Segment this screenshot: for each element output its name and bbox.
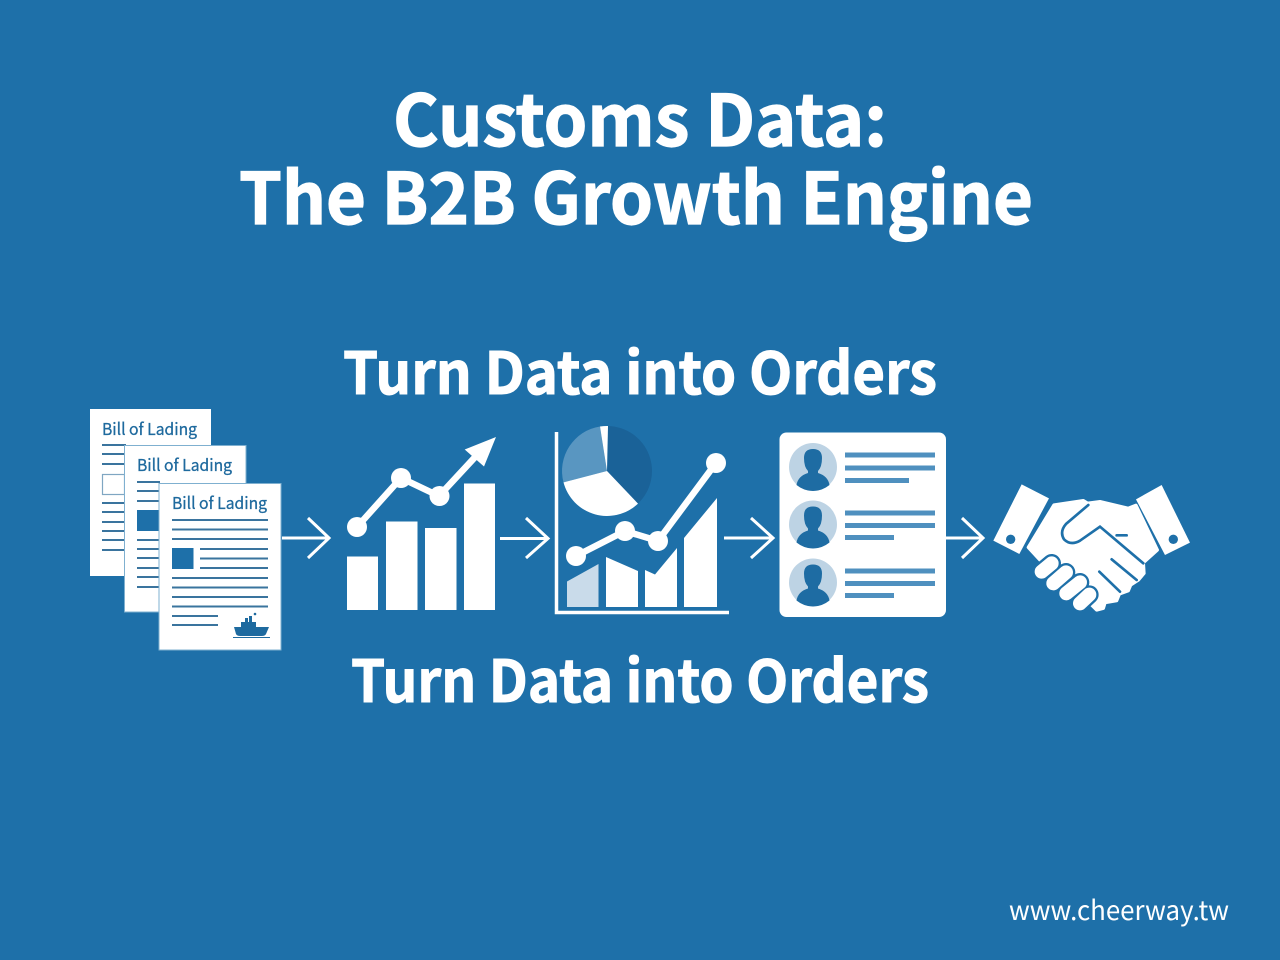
heading: top tagline: Turn Data into Orders <box>343 327 937 411</box>
panel: customer list card <box>780 432 946 617</box>
title <box>239 65 1033 245</box>
document: middle <box>124 446 246 612</box>
avatar 1 <box>789 443 837 491</box>
document: front: Bill of Lading <box>172 490 268 514</box>
avatar 3 <box>789 558 837 606</box>
arrow 4 <box>945 518 983 558</box>
arrow 3 <box>724 518 773 558</box>
bars <box>567 564 598 607</box>
pie chart <box>562 426 652 516</box>
icon: analytics chart with pie <box>556 426 729 612</box>
icon: stacked bill of lading documents <box>90 409 281 650</box>
icon: handshake <box>993 484 1190 610</box>
contact text lines <box>845 452 935 598</box>
arrow 1 <box>282 518 329 558</box>
arrow 2 <box>500 518 548 558</box>
document: back <box>90 409 211 576</box>
icon: growth bar chart <box>347 437 496 610</box>
document: front <box>159 484 281 650</box>
document: middle: Bill of Lading <box>137 452 233 476</box>
icon: ship <box>233 613 270 638</box>
title: Customs Data: <box>393 65 887 167</box>
title: The B2B Growth Engine <box>239 143 1033 245</box>
avatar 2 <box>789 500 837 548</box>
axes <box>556 432 729 612</box>
document: back: Bill of Lading <box>102 416 198 440</box>
heading: bottom tagline: Turn Data into Orders <box>351 635 929 719</box>
trend line <box>566 453 726 566</box>
website url: www.cheerway.tw <box>1009 889 1229 928</box>
